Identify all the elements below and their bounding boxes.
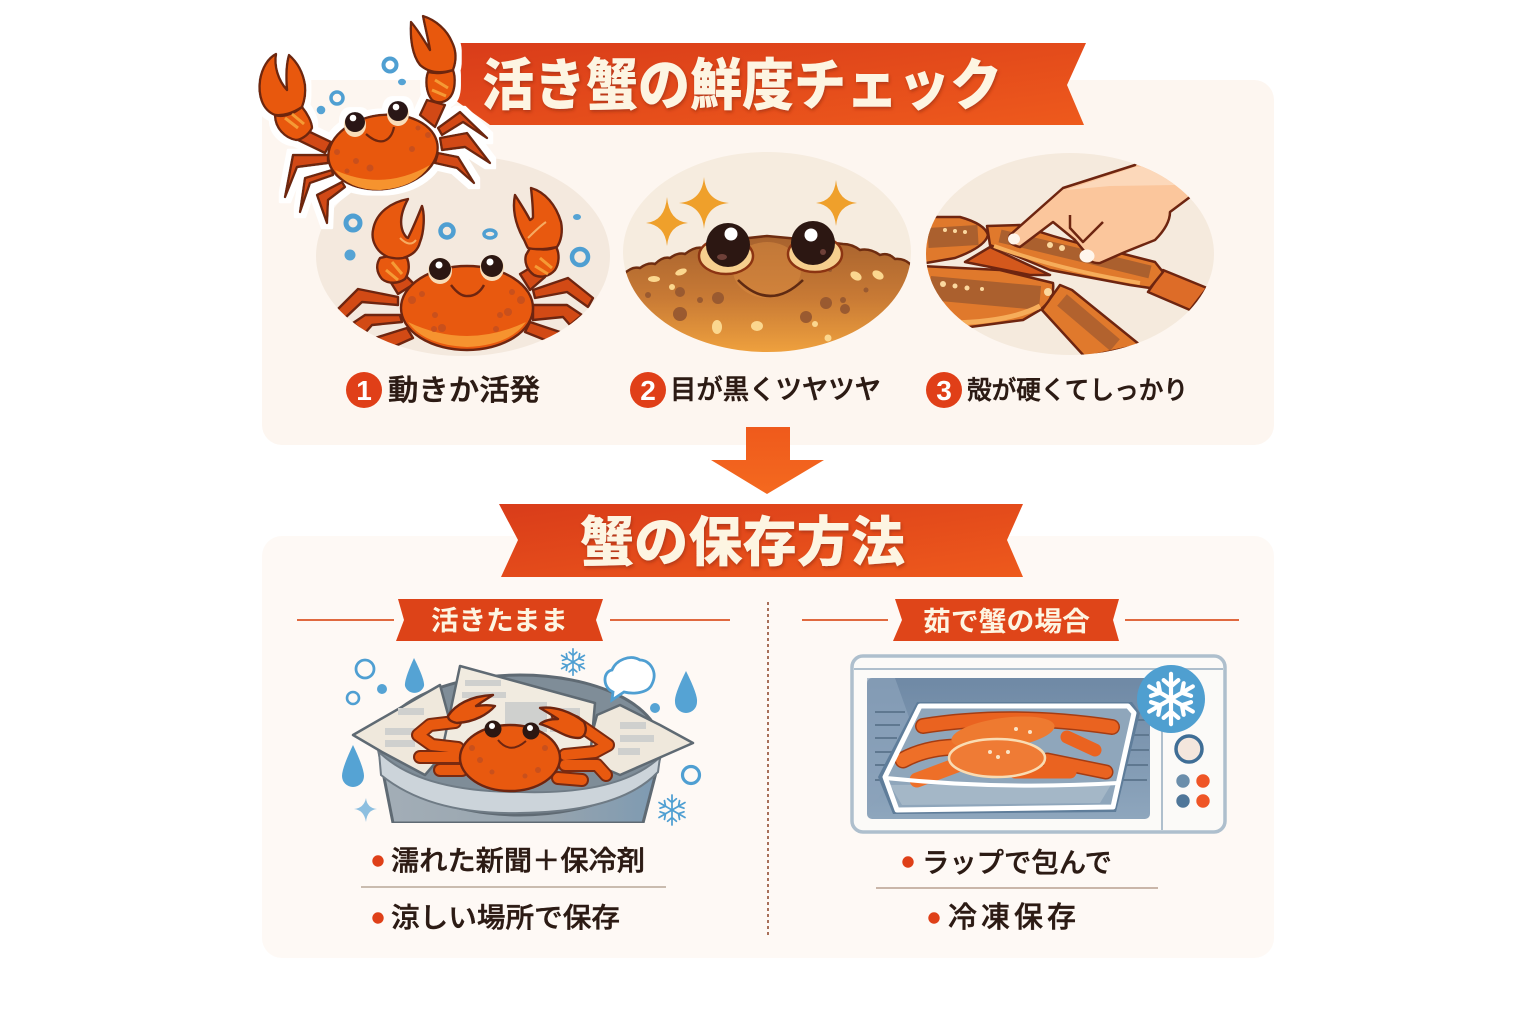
heading: boiled crab: 茹で蟹の場合 (923, 607, 1090, 637)
title banner (455, 43, 1086, 125)
label 1: 動きか活発 (388, 374, 540, 407)
bullets: live crab: 濡れた新聞＋保冷剤 (391, 845, 645, 876)
bullets: live crab: 涼しい場所で保存 (391, 902, 620, 933)
bullets: boiled crab: ラップで包んで (922, 847, 1112, 878)
label 3: 殻が硬くてしっかり (967, 377, 1188, 405)
label 1: 1 (356, 375, 372, 406)
tray of crab (878, 702, 1140, 814)
panel: freshness check (262, 80, 1274, 445)
icon: bubbles (344, 214, 588, 265)
controls (1176, 736, 1210, 808)
icon: crab waving claws (337, 188, 593, 350)
heading: live crab (297, 599, 730, 641)
oval: crab eyes close-up (620, 152, 912, 360)
bullets: boiled crab (876, 847, 1158, 934)
newspaper (353, 666, 693, 775)
title banner: 活き蟹の鮮度チェック (482, 54, 1002, 117)
icon: mascot bubbles (317, 58, 406, 114)
column divider (767, 602, 769, 938)
section banner: 蟹の保存方法 (580, 513, 905, 573)
bullets: live crab (361, 845, 666, 933)
heading: live crab: 活きたまま (431, 606, 568, 636)
label 3 (926, 372, 1188, 408)
panel: storage methods (262, 536, 1274, 958)
label 2: 目が黒くツヤツヤ (670, 375, 881, 405)
heading: boiled crab (802, 599, 1239, 641)
label 1 (346, 372, 540, 408)
crab in bucket (418, 695, 608, 791)
illustration: freezer (852, 656, 1225, 832)
arrow (711, 427, 824, 494)
icon: mascot crab sticker (260, 16, 490, 223)
section banner (499, 504, 1023, 577)
label 3: 3 (936, 375, 952, 406)
icon: sparkles (646, 177, 857, 246)
label 2 (630, 372, 881, 408)
oval: active crab (316, 156, 610, 356)
label 2: 2 (640, 375, 656, 406)
icon: freezer snowflake (1137, 665, 1205, 733)
bullets: boiled crab: 冷凍保存 (948, 901, 1076, 934)
icons: water and cold (342, 649, 700, 825)
illustration: crab in bucket (353, 666, 693, 823)
oval: hand pressing shell (926, 153, 1214, 355)
